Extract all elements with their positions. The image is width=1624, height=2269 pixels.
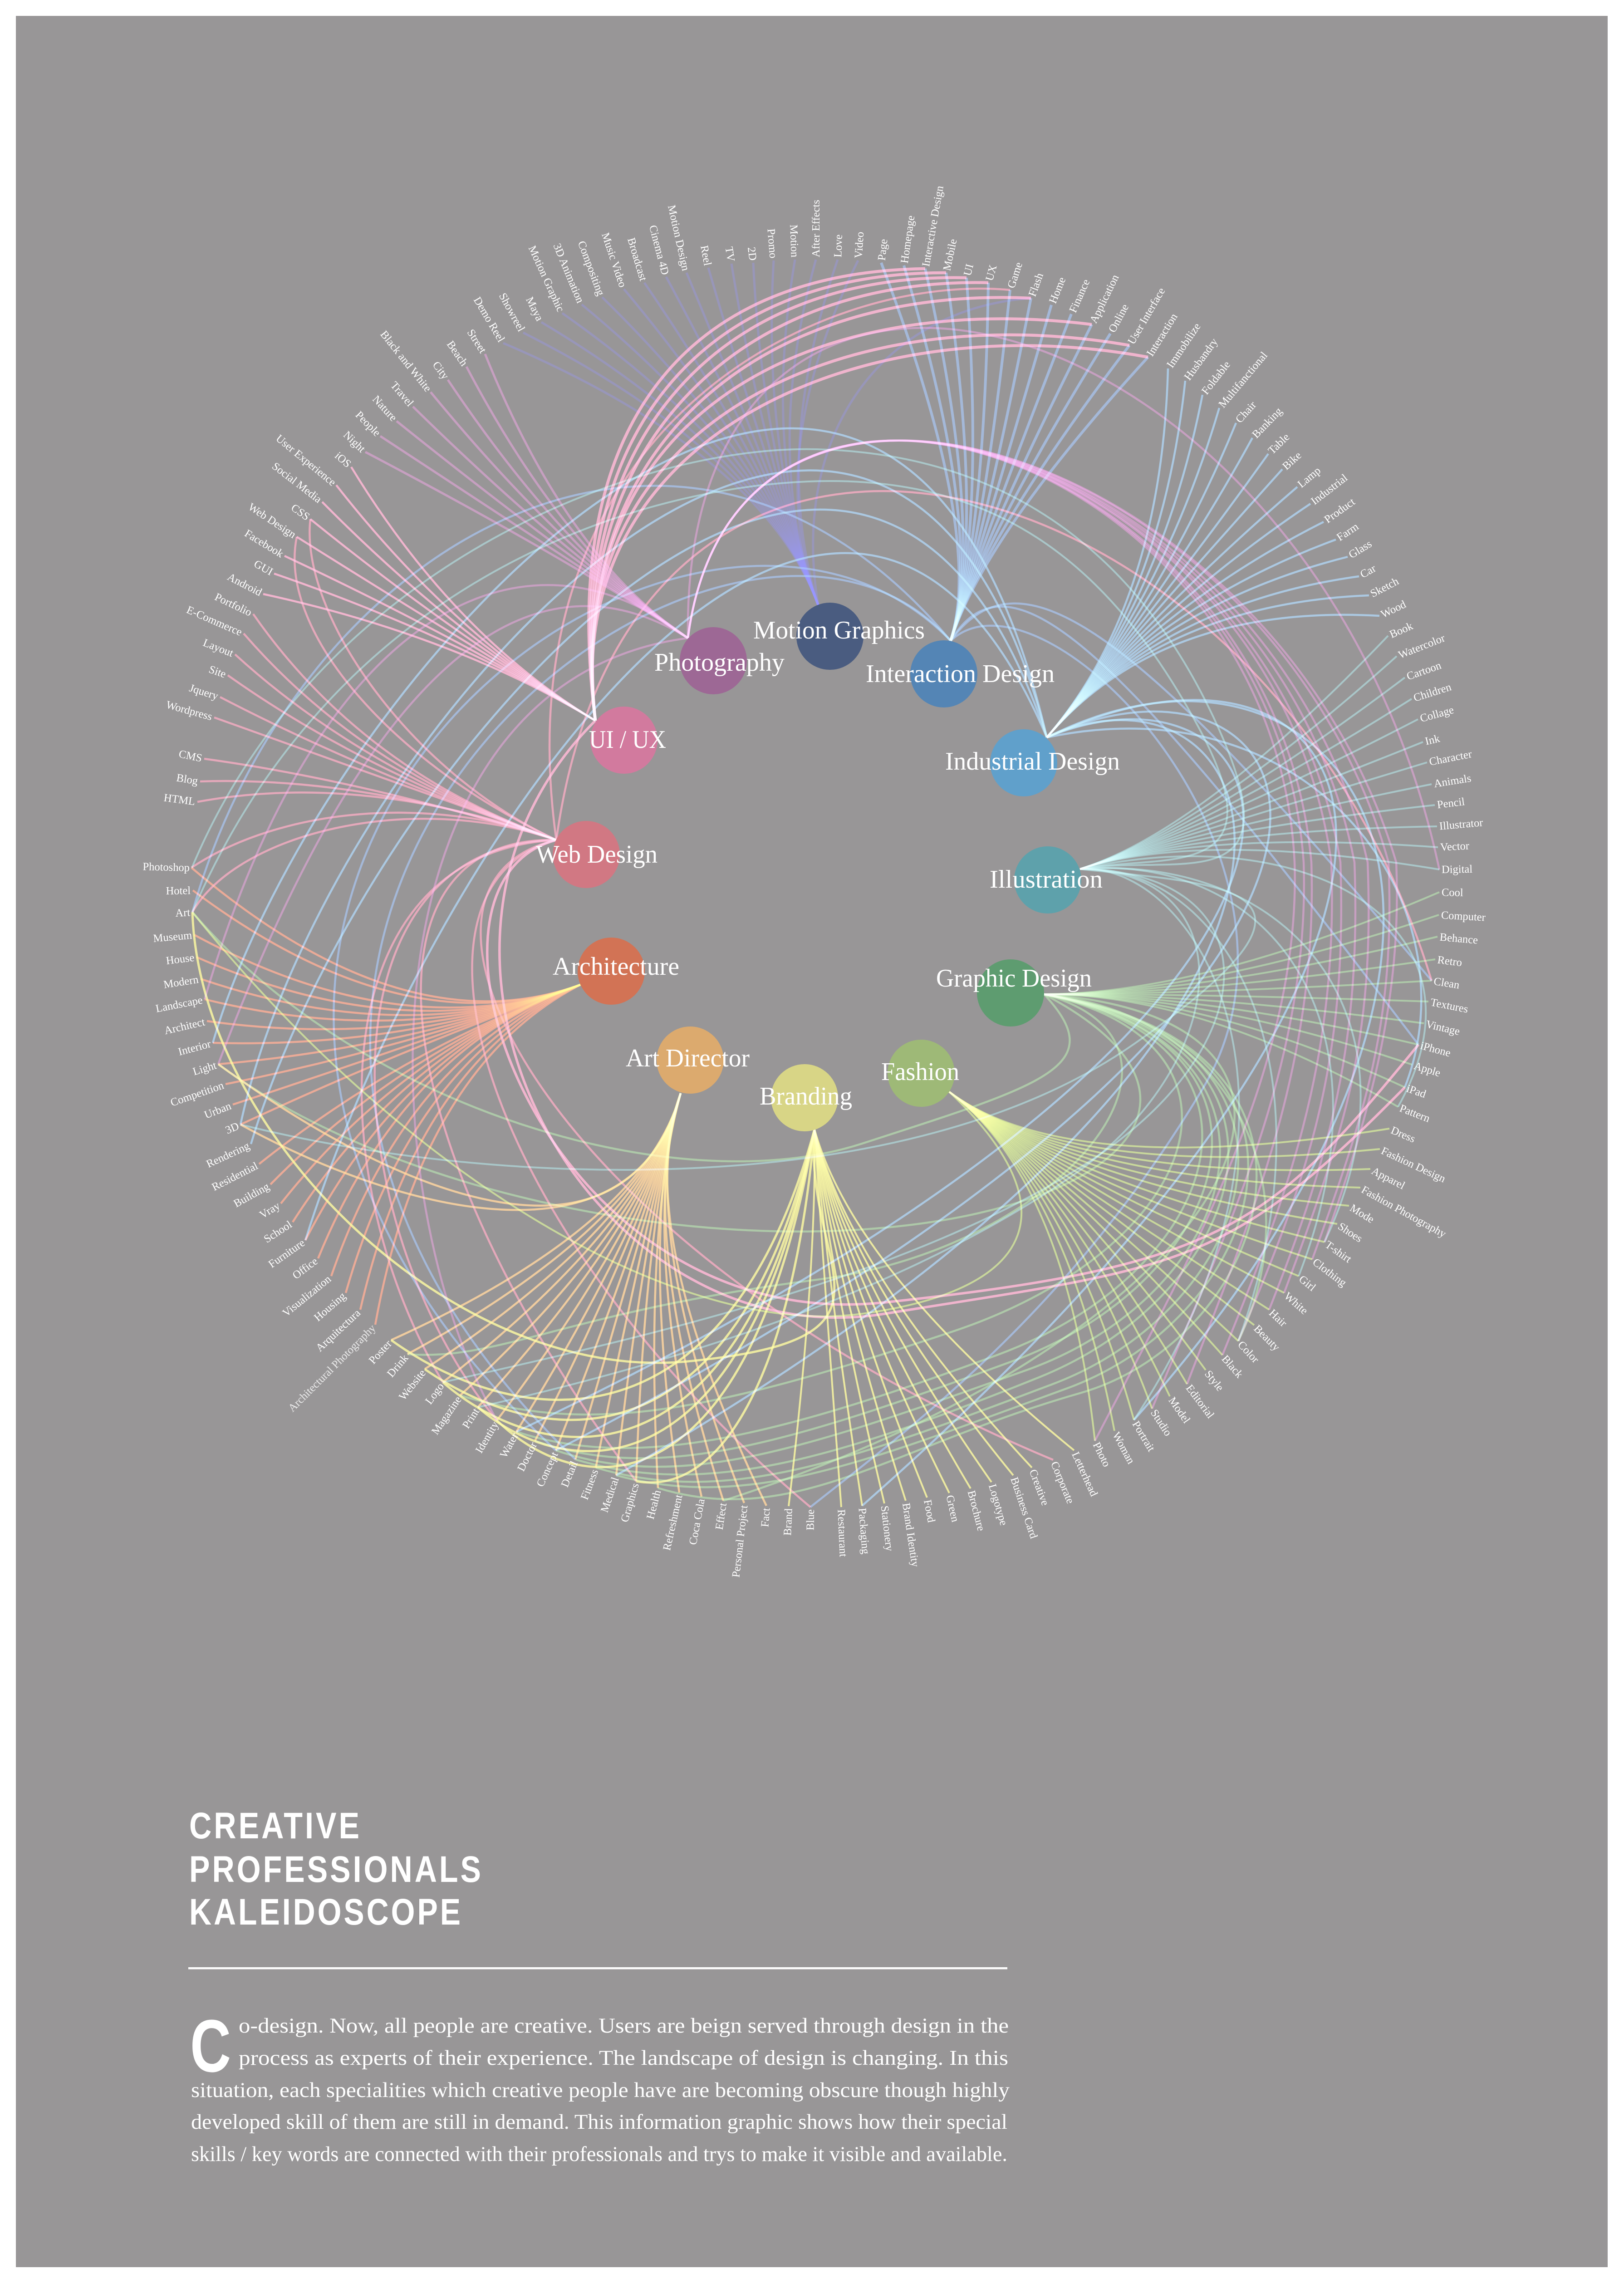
keyword labels: left half of the ring: Art (175, 906, 191, 919)
keyword labels: right half of the ring: Page (876, 238, 890, 261)
keyword labels: right half of the ring: Woman (1110, 1430, 1137, 1466)
keyword labels: right half of the ring: Vector (1440, 840, 1470, 854)
links: web design long arcs (362, 289, 1432, 1507)
keyword labels: left half of the ring: Site (207, 663, 228, 681)
keyword labels: left half of the ring: 3D (224, 1120, 241, 1137)
keyword labels: right half of the ring: Cool (1442, 886, 1463, 899)
label: interaction design: Interaction Design (866, 660, 1055, 688)
keyword labels: left half of the ring: Blog (176, 771, 199, 787)
keyword labels: left half of the ring: Fact (759, 1508, 773, 1527)
links: ui / ux long arcs from the top (589, 269, 1148, 721)
keyword labels: right half of the ring: White (1282, 1290, 1310, 1317)
keyword labels: left half of the ring: Blue (805, 1509, 817, 1530)
keyword labels: right half of the ring: User Interface (1125, 285, 1168, 347)
keyword labels: right half of the ring: Children (1412, 681, 1453, 704)
keyword labels: right half of the ring: Packaging (856, 1508, 872, 1555)
links: graphic design keyword fan (1044, 892, 1439, 1107)
keyword labels: left half of the ring: 2D (745, 246, 759, 261)
keyword labels: left half of the ring: Building (231, 1180, 271, 1210)
keyword labels: left half of the ring: Reel (698, 245, 714, 267)
label: branding: Branding (760, 1082, 852, 1110)
intro paragraph with drop cap: skills / key words are connected with their professionals and trys to make it visible and available. (191, 2142, 1007, 2166)
keyword labels: right half of the ring: Game (1005, 260, 1025, 290)
keyword labels: right half of the ring: Vintage (1425, 1018, 1461, 1038)
keyword labels: right half of the ring: Flash (1026, 271, 1046, 298)
keyword labels: left half of the ring: Black and White (378, 329, 434, 394)
links: illustration long arcs (192, 449, 1426, 1420)
keyword labels: right half of the ring: Pattern (1398, 1102, 1432, 1125)
keyword labels: left half of the ring: Brand (781, 1508, 795, 1536)
node: photography (680, 627, 747, 694)
keyword labels: left half of the ring: Print (460, 1406, 482, 1431)
keyword labels: left half of the ring: Music Video (599, 231, 629, 289)
keyword labels: left half of the ring: Motion Design (665, 204, 692, 272)
keyword labels: left half of the ring: Poster (367, 1338, 394, 1366)
keyword labels: left half of the ring: Housing (312, 1290, 348, 1324)
keyword labels: right half of the ring: Video (852, 231, 866, 259)
keyword labels: right half of the ring: Mobile (941, 238, 959, 272)
keyword labels: left half of the ring: Refreshment (661, 1493, 685, 1552)
title: KALEIDOSCOPE (189, 1891, 463, 1933)
keyword labels: right half of the ring: Illustrator (1439, 816, 1483, 833)
keyword labels: right half of the ring: Beauty (1251, 1322, 1282, 1354)
intro paragraph with drop cap: o-design. Now, all people are creative. Users are beign served through design in the (239, 2014, 1009, 2038)
keyword labels: left half of the ring: House (165, 952, 195, 967)
links: art director keyword fan (218, 1064, 766, 1506)
node: interaction design (910, 640, 977, 707)
node: architecture (578, 938, 645, 1005)
keyword labels: right half of the ring: Stationery (878, 1505, 896, 1552)
keyword labels: right half of the ring: Lamp (1295, 464, 1323, 491)
links: graphic design long arcs (192, 912, 1266, 1501)
keyword labels: right half of the ring: Home (1047, 275, 1068, 305)
keyword labels: right half of the ring: Car (1358, 562, 1378, 581)
chart: kaleidoscope connection network (191, 260, 1439, 1507)
keyword labels: left half of the ring: Personal Project (730, 1504, 750, 1578)
keyword labels: left half of the ring: Layout (201, 637, 235, 659)
keyword labels: right half of the ring: Portrait (1130, 1419, 1158, 1454)
keyword labels: right half of the ring: After Effects (810, 200, 822, 257)
keyword labels: left half of the ring: Drink (385, 1352, 411, 1380)
keyword labels: left half of the ring: Compositing (575, 239, 607, 297)
keyword labels: right half of the ring: UX (983, 263, 1000, 282)
links: branding long arcs (192, 912, 834, 1483)
keyword labels: left half of the ring: Doctor (515, 1440, 540, 1473)
keyword labels: right half of the ring: Shoes (1336, 1220, 1364, 1245)
keyword labels: left half of the ring: Medical (599, 1475, 622, 1514)
keyword labels: right half of the ring: Banking (1250, 405, 1285, 441)
keyword labels: right half of the ring: Book (1388, 620, 1415, 641)
keyword labels: right half of the ring: Mode (1348, 1202, 1376, 1226)
keyword labels: left half of the ring: Graphics (618, 1482, 642, 1524)
label: ui / ux: UI / UX (589, 726, 666, 754)
keyword labels: left half of the ring: TV (723, 246, 737, 262)
keyword labels: right half of the ring: Wood (1379, 598, 1408, 620)
links: photography long arcs (205, 328, 1439, 1441)
keyword labels: right half of the ring: Black (1219, 1353, 1246, 1381)
keyword labels: left half of the ring: Travel (388, 379, 416, 409)
links: interaction design keyword fan (881, 263, 1148, 641)
keyword labels: left half of the ring: Effect (713, 1502, 729, 1531)
keyword labels: left half of the ring: Demo Reel (471, 295, 507, 344)
profession nodes (553, 603, 1081, 1131)
keyword labels: left half of the ring: Photoshop (142, 860, 190, 874)
node: ui / ux (590, 707, 657, 774)
links: ui / ux long arcs to iPhone and iPad (487, 721, 1418, 1317)
keyword labels: left half of the ring: User Experience (274, 432, 338, 489)
keyword labels: left half of the ring: CSS (289, 501, 312, 523)
keyword labels: right half of the ring: Food (921, 1499, 937, 1523)
keyword labels: left half of the ring: Jquery (188, 682, 220, 702)
keyword labels: left half of the ring: Visualization (280, 1273, 334, 1319)
keyword labels: right half of the ring: Character (1428, 748, 1473, 768)
label: motion graphics: Motion Graphics (753, 616, 925, 644)
keyword labels: left half of the ring: Facebook (242, 527, 286, 560)
keyword labels: right half of the ring: Collage (1418, 704, 1455, 725)
keyword labels: right half of the ring: Restaurant (835, 1509, 849, 1557)
keyword labels: left half of the ring: Broadcast (625, 236, 649, 282)
keyword labels: right half of the ring: Business Card (1008, 1476, 1040, 1540)
keyword labels: left half of the ring: 3D Animation (551, 242, 586, 305)
node: industrial design (990, 729, 1057, 796)
keyword labels: right half of the ring: Brochure (965, 1489, 987, 1532)
keyword labels: right half of the ring: Photo (1090, 1440, 1113, 1469)
keyword labels: right half of the ring: Application (1088, 273, 1121, 325)
keyword labels: right half of the ring: Glass (1346, 538, 1374, 561)
keyword labels: right half of the ring: Pencil (1436, 796, 1466, 811)
label: photography: Photography (654, 648, 785, 677)
node: illustration (1014, 846, 1081, 913)
keyword labels: left half of the ring: Coca Cola (687, 1498, 707, 1546)
keyword labels: left half of the ring: Architectural Photography (286, 1322, 378, 1414)
keyword labels: right half of the ring: Dress (1389, 1124, 1417, 1145)
intro paragraph with drop cap (190, 2004, 1010, 2166)
keyword labels: right half of the ring: Homepage (898, 215, 917, 264)
keyword labels: left half of the ring: Hotel (166, 884, 191, 897)
keyword labels: left half of the ring: HTML (163, 791, 196, 808)
keyword labels: right half of the ring: Industrial (1309, 471, 1350, 507)
label: graphic design: Graphic Design (936, 964, 1092, 992)
keyword labels: right half of the ring: Logotype (986, 1483, 1010, 1527)
keyword labels: right half of the ring: Green (943, 1494, 962, 1523)
keyword labels: left half of the ring: Portfolio (213, 591, 254, 619)
keyword labels: right half of the ring: Computer (1441, 909, 1486, 923)
drop cap: C (190, 2004, 231, 2087)
keyword labels: right half of the ring: Interactive Design (920, 185, 946, 268)
keyword labels: left half of the ring: Competition (169, 1079, 226, 1109)
links: industrial design keyword fan (1047, 368, 1379, 737)
keyword labels: right half of the ring: Bike (1280, 449, 1304, 472)
label: fashion: Fashion (881, 1058, 959, 1086)
keyword labels: right half of the ring: Digital (1442, 863, 1472, 876)
keyword labels: left half of the ring: Wordpress (165, 698, 214, 723)
profession labels (536, 616, 1120, 1110)
keyword labels: right half of the ring: Style (1202, 1368, 1226, 1394)
keyword labels: left half of the ring: iOS (332, 450, 353, 470)
intro paragraph with drop cap: developed skill of them are still in demand. This information graphic shows how their special (191, 2110, 1007, 2134)
keyword labels: right half of the ring: T-shirt (1323, 1238, 1354, 1265)
keyword labels: right half of the ring: Multifanctional (1216, 349, 1270, 410)
keyword labels: right half of the ring: Fashion Photography (1359, 1184, 1448, 1240)
keyword labels: left half of the ring: Web Design (246, 501, 298, 541)
keyword labels: left half of the ring: GUI (252, 558, 275, 578)
keyword labels: left half of the ring: Landscape (155, 994, 204, 1015)
keyword labels: left half of the ring: Health (644, 1489, 663, 1521)
keyword labels: left half of the ring: CMS (178, 748, 203, 765)
links: ui / ux keyword fan (263, 467, 595, 721)
keyword labels: left half of the ring: Residential (210, 1160, 260, 1193)
keyword labels: left half of the ring: People (353, 409, 383, 439)
keyword labels: left half of the ring: E-Commerce (185, 604, 244, 638)
keyword labels: right half of the ring: Editorial (1183, 1382, 1217, 1421)
keyword labels: left half of the ring: Maya (523, 295, 545, 323)
links: branding keyword fan (789, 1130, 1074, 1507)
keyword labels: right half of the ring: Foldable (1199, 359, 1233, 397)
keyword labels: right half of the ring: Textures (1429, 996, 1469, 1016)
keyword labels: left half of the ring: Urban (203, 1100, 233, 1121)
keyword labels: right half of the ring: Table (1266, 431, 1292, 457)
label: art director: Art Director (626, 1044, 750, 1072)
keyword labels: left half of the ring: Magazine (429, 1394, 464, 1437)
keyword labels: right half of the ring: Immobilize (1164, 321, 1203, 370)
keyword labels: right half of the ring: iPhone (1419, 1040, 1452, 1059)
node: graphic design (977, 959, 1044, 1026)
keyword labels: right half of the ring: Sketch (1368, 575, 1401, 600)
links: motion graphics keyword fan (503, 260, 1031, 605)
keyword labels: right half of the ring: Color (1235, 1339, 1261, 1365)
keyword labels: left half of the ring: Vray (257, 1199, 283, 1221)
keyword labels: left half of the ring: Modern (162, 973, 199, 991)
keyword labels: right half of the ring: Chair (1233, 399, 1259, 426)
title (189, 1805, 483, 1933)
keyword labels: right half of the ring: Love (832, 234, 845, 257)
keyword labels: left half of the ring: Water (498, 1431, 521, 1460)
keyword labels: left half of the ring: Light (191, 1059, 218, 1078)
keyword labels: left half of the ring: Android (226, 571, 264, 599)
divider rule (188, 1967, 1007, 1969)
links: architecture keyword fan (191, 868, 580, 1325)
keyword labels: right half of the ring: Watercolor (1397, 632, 1447, 661)
node: branding (771, 1064, 838, 1131)
keyword labels: left half of the ring: Street (465, 327, 489, 355)
keyword labels: left half of the ring: Identity (473, 1419, 501, 1455)
links: web design keyword fan (191, 519, 556, 912)
title: CREATIVE (189, 1805, 362, 1847)
keyword labels: right half of the ring: Husbandry (1182, 336, 1221, 383)
keyword labels: right half of the ring: UI (962, 263, 976, 277)
label: illustration: Illustration (990, 865, 1103, 894)
keyword labels: right half of the ring: Corporate (1048, 1460, 1076, 1506)
keyword labels: left half of the ring: City (430, 359, 451, 382)
keyword labels: left half of the ring: Website (397, 1367, 428, 1403)
links: fashion keyword fan (192, 912, 1389, 1441)
keyword labels: left half of the ring: Promo (765, 228, 780, 259)
keyword labels: right half of the ring: Animals (1433, 772, 1472, 790)
keyword labels: right half of the ring: Apparel (1369, 1165, 1407, 1192)
keyword labels: right half of the ring: Farm (1335, 521, 1361, 544)
label: architecture: Architecture (553, 953, 679, 981)
keyword labels: left half of the ring: Office (290, 1255, 320, 1282)
keyword labels: right half of the ring: Ink (1424, 732, 1442, 748)
keyword labels: left half of the ring (142, 204, 817, 1578)
node: fashion (888, 1040, 955, 1107)
keyword labels: left half of the ring: Rendering (204, 1139, 251, 1170)
keyword labels: left half of the ring: Motion Graphic (526, 244, 567, 314)
keyword labels: left half of the ring: Interior (177, 1038, 212, 1058)
keyword labels: left half of the ring: Fitness (579, 1468, 601, 1502)
keyword labels: right half of the ring: Clothing (1310, 1256, 1349, 1289)
keyword labels: left half of the ring: Detail (559, 1459, 580, 1489)
keyword labels: right half of the ring: Interaction (1144, 311, 1180, 359)
keyword labels: right half of the ring: iPad (1405, 1082, 1428, 1100)
keyword labels: right half of the ring: Online (1106, 302, 1131, 334)
keyword labels: left half of the ring: Museum (152, 929, 192, 945)
keyword labels: right half of the ring: Creative (1027, 1468, 1051, 1507)
intro paragraph with drop cap: situation, each specialities which creative people have are becoming obscure though highly (191, 2078, 1010, 2102)
keyword labels: left half of the ring: Beach (444, 339, 470, 368)
keyword labels: right half of the ring: Girl (1296, 1273, 1318, 1294)
keyword labels: left half of the ring: Logo (423, 1380, 446, 1407)
keyword labels: right half of the ring: Model (1166, 1395, 1192, 1426)
links: interaction design long arcs (192, 486, 1432, 1507)
node: motion graphics (796, 603, 864, 670)
links: industrial design long arcs (213, 428, 1421, 1506)
keyword labels: left half of the ring: Architect (163, 1016, 206, 1037)
keyword labels: right half of the ring: Product (1322, 496, 1357, 526)
keyword labels: left half of the ring: Nature (370, 393, 399, 424)
keyword labels: left half of the ring: Motion (787, 224, 801, 257)
keyword labels: left half of the ring: Night (341, 429, 368, 455)
keyword labels: right half of the ring: Fashion Design (1379, 1144, 1447, 1185)
label: industrial design: Industrial Design (945, 747, 1120, 776)
intro paragraph with drop cap: process as experts of their experience. The landscape of design is changing. In this (239, 2046, 1008, 2070)
title: PROFESSIONALS (189, 1849, 483, 1890)
keyword labels: left half of the ring: Furniture (266, 1237, 307, 1271)
keyword labels: right half of the ring (810, 185, 1486, 1568)
keyword labels: right half of the ring: Brand Identity (900, 1502, 922, 1568)
keyword labels: right half of the ring: Studio (1148, 1407, 1174, 1438)
node: art director (657, 1026, 724, 1094)
node: web design (553, 821, 620, 888)
keyword labels: right half of the ring: Apple (1413, 1060, 1442, 1079)
keyword labels: left half of the ring: School (262, 1218, 294, 1246)
keyword labels: left half of the ring: Showreel (496, 291, 527, 334)
keyword labels: right half of the ring: Clean (1433, 975, 1460, 992)
links: illustration keyword fan (1080, 636, 1439, 869)
keyword labels: left half of the ring: Concept (534, 1450, 561, 1489)
label: web design: Web Design (536, 840, 657, 869)
keyword labels: right half of the ring: Retro (1437, 954, 1463, 969)
keyword labels: left half of the ring: Arquitectura (314, 1307, 363, 1354)
keyword labels: right half of the ring: Hair (1266, 1307, 1289, 1329)
keyword labels: right half of the ring: Behance (1439, 931, 1478, 947)
links: photography keyword fan (365, 354, 688, 638)
keyword labels: left half of the ring: Social Media (270, 460, 324, 506)
keyword labels: left half of the ring: Cinema 4D (647, 224, 671, 276)
keyword labels: right half of the ring: Cartoon (1405, 659, 1443, 683)
keyword labels: right half of the ring: Finance (1067, 277, 1092, 314)
keyword labels: right half of the ring: Letterhead (1069, 1450, 1100, 1498)
